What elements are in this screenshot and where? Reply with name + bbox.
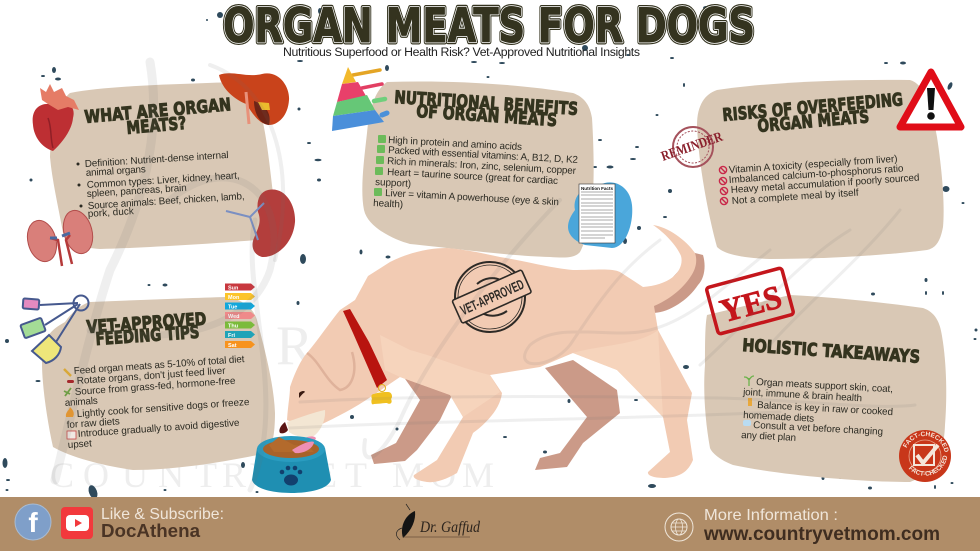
text: feeding tips list: Feed organ meats as 5-10% of total diet xyxy=(73,354,245,377)
footer bar xyxy=(0,497,980,551)
watermark wordmark: O xyxy=(83,455,109,495)
watermark wordmark xyxy=(50,315,494,495)
watermark wordmark: U xyxy=(122,455,148,495)
text: like and subscribe xyxy=(101,506,224,541)
icon: dog bowl xyxy=(252,436,331,493)
muzzle xyxy=(287,410,325,437)
subtitle: Nutritious Superfood or Health Risk? Vet-Approved Nutritional Insights xyxy=(283,45,640,59)
bone tag xyxy=(371,392,392,404)
text: takeaways list: homemade diets xyxy=(743,410,814,425)
text: organ meat definition list: pork, duck xyxy=(87,206,134,220)
icon: liver xyxy=(219,73,289,125)
heading: nutritional benefits: OF ORGAN MEATS xyxy=(416,102,558,131)
icon: facebook: f xyxy=(28,507,38,538)
text: overfeeding risks list: Heavy metal accumulation if poorly sourced xyxy=(730,172,920,196)
text: organ meat definition list: Common types: Liver, kidney, heart, xyxy=(86,170,240,191)
panel: holistic takeaways xyxy=(704,295,946,482)
body xyxy=(287,225,696,482)
text: benefits checklist: Liver = vitamin A powerhouse (eye & skin xyxy=(385,188,559,208)
text: feeding tips list: animals xyxy=(64,396,98,409)
text: takeaways list: joint, immune & brain health xyxy=(742,387,862,404)
text: takeaways list: Consult a vet before changing xyxy=(753,420,883,438)
text: organ meat definition list: spleen, pancreas, brain xyxy=(86,183,187,200)
watermark: script strokes xyxy=(55,62,915,490)
title: ORGAN MEATS FOR DOGS xyxy=(223,0,755,54)
icon: youtube xyxy=(61,507,93,539)
text: feeding tips list: for raw diets xyxy=(66,416,120,431)
text: organ meat definition list: animal organs xyxy=(85,164,146,179)
icon: weekday tags: Mon xyxy=(228,295,240,301)
text: overfeeding risks list: Imbalanced calcium-to-phosphorus ratio xyxy=(728,163,904,186)
heading: vet-approved feeding tips: VET-APPROVED xyxy=(86,310,207,338)
logo: signature with quill xyxy=(396,504,481,540)
title: ORGAN MEATS FOR DOGS xyxy=(223,0,755,54)
heading: what are organ meats: MEATS? xyxy=(126,114,187,139)
watermark wordmark: M xyxy=(392,455,424,495)
stamp: vet-approved: VET-APPROVED xyxy=(458,276,526,318)
heading: what are organ meats: WHAT ARE ORGAN xyxy=(84,95,232,128)
text: feeding tips list: Lightly cook for sensitive dogs or freeze xyxy=(76,397,250,420)
text: takeaways list: any diet plan xyxy=(741,430,796,444)
icon: weekday tags: Sun xyxy=(228,286,239,292)
stamp: reminder: REMINDER xyxy=(659,130,726,165)
icon: kidneys xyxy=(23,207,97,266)
collar xyxy=(343,309,387,388)
icon: weekday tags: Sat xyxy=(228,343,237,349)
watermark wordmark: N xyxy=(158,455,184,495)
watermark wordmark: R xyxy=(222,455,246,495)
text: like and subscribe: DocAthena xyxy=(101,521,201,541)
icon: spleen xyxy=(226,189,295,257)
text: organ meat definition list: Source animals: Beef, chicken, lamb, xyxy=(87,191,245,212)
text: more information: More Information : xyxy=(704,507,838,524)
watermark wordmark: C xyxy=(50,455,74,495)
text: feeding tips list: Rotate organs, don't just feed liver xyxy=(76,366,227,387)
illustration: dog eating from bowl xyxy=(279,225,705,482)
icon: food pyramid xyxy=(332,67,387,131)
watermark wordmark: Y xyxy=(250,455,276,495)
text: like and subscribe: Like & Subscribe: xyxy=(101,506,224,523)
text: overfeeding risks list xyxy=(719,154,920,207)
icon: facebook xyxy=(15,504,51,540)
stamp: vet-approved xyxy=(452,262,532,332)
stamp: YES xyxy=(706,268,794,334)
panel: vet-approved feeding tips xyxy=(42,297,275,470)
icon: heart xyxy=(33,84,79,151)
icon: weekday tags xyxy=(225,284,255,349)
text: benefits checklist xyxy=(373,135,578,211)
text: takeaways list: Balance is key in raw or cooked xyxy=(757,400,893,418)
icon: weekday tags: Tue xyxy=(228,304,237,310)
heading: risks of overfeeding: ORGAN MEATS xyxy=(757,107,870,137)
watermark wordmark: T xyxy=(195,455,217,495)
heading: nutritional benefits xyxy=(394,88,579,131)
text: benefits checklist: support) xyxy=(375,177,411,190)
panel: risks of overfeeding xyxy=(697,80,944,259)
watermark wordmark: E xyxy=(315,455,337,495)
stamp: YES: YES xyxy=(716,279,786,330)
text: feeding tips list xyxy=(64,354,250,451)
badge: fact-checked: FACT-CHECKED xyxy=(908,456,947,476)
heading: holistic takeaways: HOLISTIC TAKEAWAYS xyxy=(742,336,921,368)
text: takeaways list: Organ meats support skin, coat, xyxy=(756,377,893,395)
watermark wordmark: O xyxy=(430,455,456,495)
icon: warning triangle xyxy=(900,72,961,127)
text: feeding tips list: Introduce gradually to avoid digestive xyxy=(77,418,240,440)
watermark wordmark: T xyxy=(345,455,367,495)
panel: nutritional benefits xyxy=(362,81,594,257)
text: overfeeding risks list: Vitamin A toxicity (especially from liver) xyxy=(728,154,898,176)
badge: fact-checked: FACT-CHECKED xyxy=(902,432,948,452)
text: benefits checklist: Rich in minerals: Iron, zinc, selenium, copper xyxy=(387,156,577,177)
heading: risks of overfeeding: RISKS OF OVERFEEDING xyxy=(722,90,904,126)
text: benefits checklist: Packed with essential vitamins: A, B12, D, K2 xyxy=(388,145,578,166)
text: feeding tips list: upset xyxy=(67,438,92,451)
text: benefits checklist: Heart = taurine source (great for cardiac xyxy=(387,167,558,187)
text: more information: www.countryvetmom.com xyxy=(703,524,940,545)
heading: vet-approved feeding tips: FEEDING TIPS xyxy=(95,323,200,350)
icon: weekday tags: Wed xyxy=(228,314,240,320)
panel: what are organ meats xyxy=(50,82,273,249)
heading: nutritional benefits: NUTRITIONAL BENEFITS xyxy=(394,88,579,120)
text: benefits checklist: High in protein and amino acids xyxy=(388,135,522,153)
icon: nutrition facts label xyxy=(568,182,632,248)
icon: measuring spoons xyxy=(20,296,88,363)
icon: weekday tags: Fri xyxy=(228,333,236,339)
watermark wordmark: M xyxy=(462,455,494,495)
text: feeding tips list: Source from grass-fed, hormone-free xyxy=(74,376,236,398)
text: organ meat definition list: Definition: Nutrient-dense internal xyxy=(84,150,229,170)
icon: nutrition facts label: Nutrition Facts xyxy=(581,186,613,191)
logo: signature with quill: Dr. Gaffud xyxy=(419,519,481,536)
badge: fact-checked xyxy=(899,430,951,482)
title: ORGAN MEATS FOR DOGS xyxy=(223,0,755,54)
far legs and tail fur xyxy=(371,253,705,470)
heading: what are organ meats xyxy=(84,95,232,139)
text: takeaways list xyxy=(741,376,893,444)
icon: globe xyxy=(665,513,693,541)
watermark wordmark: R xyxy=(276,315,314,377)
heading: vet-approved feeding tips xyxy=(86,310,207,350)
text: more information xyxy=(703,507,940,545)
text: overfeeding risks list: Not a complete meal by itself xyxy=(731,188,859,207)
text: organ meat definition list xyxy=(76,150,245,220)
text: benefits checklist: health) xyxy=(373,198,403,211)
heading: risks of overfeeding xyxy=(722,90,904,137)
icon: weekday tags: Thu xyxy=(228,324,238,330)
